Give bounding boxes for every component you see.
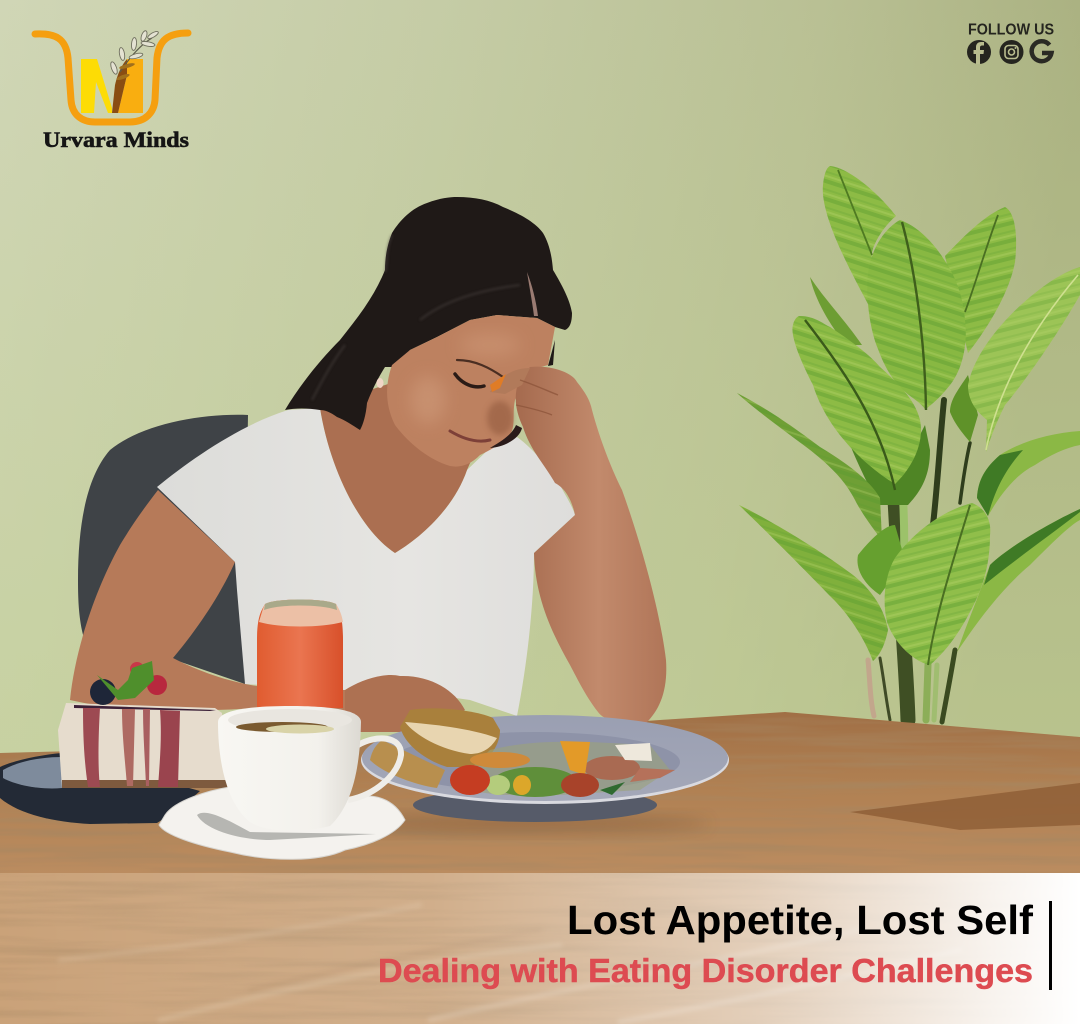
leaf: left narrow <box>737 393 882 540</box>
leaf: behind left big <box>835 404 930 505</box>
hair <box>285 197 572 430</box>
leaf: central big <box>867 220 966 410</box>
hair parting <box>527 272 538 316</box>
leaf: right middle <box>977 431 1080 516</box>
leaf: left big <box>792 316 921 490</box>
icon: google <box>1032 41 1052 61</box>
hair highlights <box>312 235 520 400</box>
eye and eyebrow <box>450 360 503 441</box>
sauce top <box>74 705 216 711</box>
face highlight <box>410 376 446 424</box>
leaf: lower centre <box>885 503 990 665</box>
leaf: small dark right <box>950 375 978 442</box>
toast <box>370 708 500 788</box>
leaf: inner small <box>857 525 905 595</box>
leaf: lower left <box>739 505 888 661</box>
leaf: small pointed <box>810 277 862 345</box>
forehead highlight <box>460 333 520 357</box>
tea cup <box>218 706 401 831</box>
nose shadow <box>487 401 513 435</box>
juice jar <box>257 600 343 708</box>
forearm and raised hand <box>516 367 666 724</box>
lower slice <box>370 740 445 788</box>
icon: instagram <box>1000 40 1024 64</box>
logo <box>35 30 189 152</box>
vertical rule <box>1049 901 1052 990</box>
background wall <box>0 0 1080 780</box>
hair strand by temple <box>548 340 555 366</box>
dark dessert plate <box>0 753 200 824</box>
face <box>387 315 555 467</box>
earring <box>376 378 384 388</box>
heading: Lost Appetite, Lost Self <box>567 897 1033 943</box>
logo cradle <box>35 33 188 122</box>
sauce streaks <box>83 708 100 787</box>
dinner plate <box>361 715 729 822</box>
plant stems <box>868 400 970 722</box>
bottom wood caption band <box>0 873 1080 1024</box>
logo wheat <box>109 30 159 81</box>
fingers at brow <box>490 368 558 415</box>
cheesecake <box>58 661 228 788</box>
left arm <box>70 490 345 712</box>
title block <box>378 897 1052 990</box>
leaf: far right <box>968 267 1080 452</box>
saucer and spoon <box>159 787 405 859</box>
follow label: FOLLOW US <box>968 22 1054 38</box>
salad <box>450 741 675 797</box>
subheading: Dealing with Eating Disorder Challenges <box>378 952 1033 989</box>
berries and mint <box>147 675 167 695</box>
logo M <box>81 59 143 113</box>
leaf: lower right <box>957 509 1080 652</box>
woman <box>70 197 666 732</box>
table top <box>0 712 1080 874</box>
follow us block <box>967 22 1054 64</box>
white t-shirt <box>157 408 575 716</box>
plant <box>737 166 1080 722</box>
hair behind cheek <box>490 425 522 448</box>
leaf: upper left <box>823 166 896 304</box>
leaf: upper right <box>945 207 1016 353</box>
logo wordmark: Urvara Minds <box>43 127 189 152</box>
resting hand <box>345 675 465 732</box>
upper slice <box>400 708 500 767</box>
icon: facebook <box>967 40 991 64</box>
neck and chest <box>320 380 480 553</box>
office chair <box>78 415 248 684</box>
